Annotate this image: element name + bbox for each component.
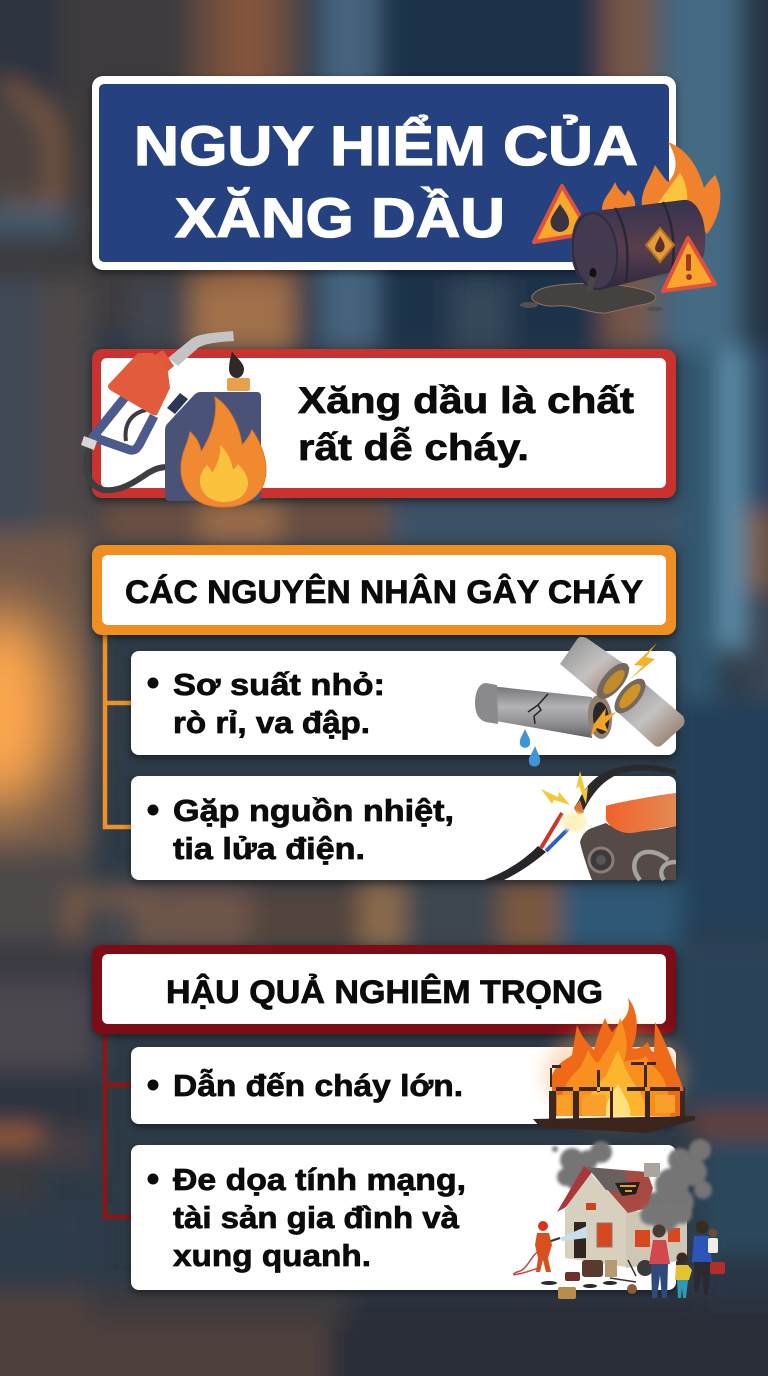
consequence card: threat to life and property: tài sản gia đình và (173, 1200, 460, 1235)
statement text: rất dễ cháy. (298, 427, 529, 468)
firefighter (514, 1221, 587, 1275)
title text: NGUY HIỂM CỦA (134, 114, 638, 177)
cause card: small negligence: Sơ suất nhỏ: (173, 667, 385, 702)
panel: flammable statement (81, 331, 676, 507)
icon: wires, sparks and hot engine (484, 765, 676, 880)
causes heading (92, 545, 676, 635)
causes connector (105, 630, 131, 827)
family (649, 1220, 725, 1298)
consequence card: large fire: Dẫn đến cháy lớn. (173, 1068, 463, 1103)
oil puddle (520, 283, 663, 313)
icon: leaking barrel with flames and warnings (520, 142, 720, 313)
icon: cracked pipe and leak (475, 637, 684, 766)
cause card: heat and sparks (131, 765, 676, 880)
consequences heading (92, 945, 676, 1034)
cause card: small negligence: rò rỉ, va đập. (173, 705, 370, 740)
consequence card: threat to life and property (131, 1139, 725, 1299)
statement text (298, 380, 634, 468)
panel: consequences (92, 945, 725, 1299)
cause card: heat and sparks: Gặp nguồn nhiệt, (173, 793, 454, 828)
icon: warning exclamation triangle (663, 238, 715, 291)
debris (541, 1260, 653, 1299)
consequence card: threat to life and property: Đe dọa tính mạng, (173, 1162, 466, 1197)
icon: warning flame triangle (534, 186, 590, 242)
title text: XĂNG DẦU (175, 186, 505, 249)
title panel (92, 76, 676, 270)
cause card: small negligence (131, 637, 684, 766)
consequence card: threat to life and property: xung quanh. (173, 1238, 371, 1273)
causes heading: CÁC NGUYÊN NHÂN GÂY CHÁY (125, 574, 643, 610)
consequences connector (105, 1030, 131, 1217)
consequence card: large fire (131, 998, 695, 1133)
icon: fuel nozzle and jerrycan (81, 331, 266, 507)
cause card: heat and sparks: tia lửa điện. (173, 831, 365, 866)
icon: damaged house, firefighter and family (514, 1139, 725, 1299)
statement text: Xăng dầu là chất (298, 380, 634, 421)
consequences heading: HẬU QUẢ NGHIÊM TRỌNG (166, 974, 603, 1010)
barrel (569, 200, 705, 293)
icon: burning house (533, 998, 695, 1133)
panel: causes (92, 545, 684, 880)
title text (134, 114, 638, 249)
